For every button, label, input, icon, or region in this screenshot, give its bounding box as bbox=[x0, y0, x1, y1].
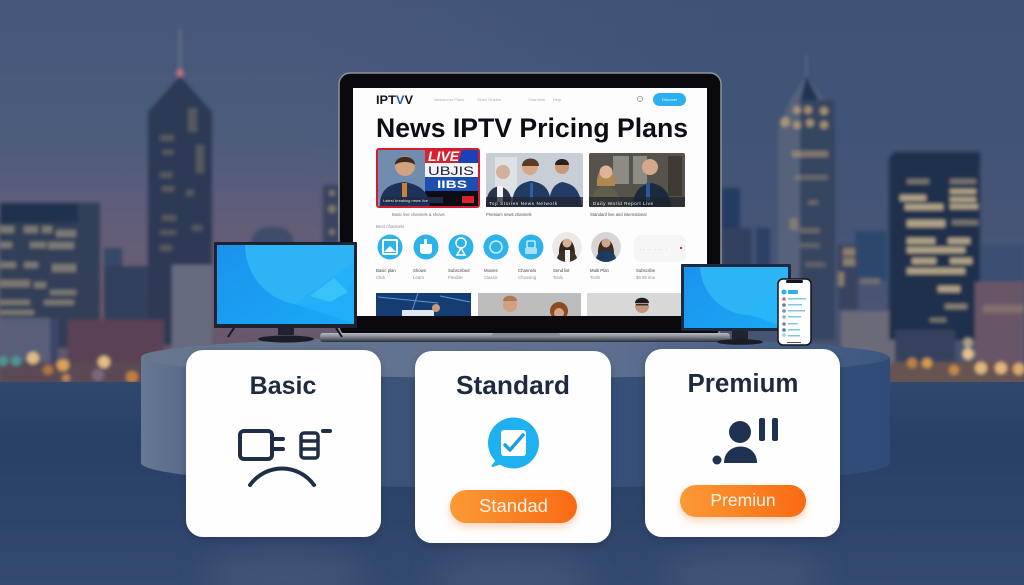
tv screen bbox=[217, 245, 354, 324]
thumbnail captions: Standard live and international bbox=[590, 212, 647, 217]
channel icon: picture bbox=[378, 234, 402, 260]
thumbnail captions: Premium news channels bbox=[486, 212, 532, 217]
background: dusk sky bbox=[0, 0, 1024, 385]
studio team thumbnail: Top Stories News Network bbox=[489, 201, 558, 206]
nav bar: Video Guides bbox=[477, 97, 501, 102]
monitor frame bbox=[681, 264, 791, 331]
right monitor bbox=[681, 264, 791, 345]
nav bar: IPTVV bbox=[376, 93, 413, 107]
bottom thumbnails bbox=[376, 292, 681, 316]
pricing card: Premium bbox=[645, 349, 840, 537]
phone menu list bbox=[782, 290, 806, 343]
channel icon: chat bbox=[484, 234, 508, 260]
Basic heading: Basic bbox=[250, 372, 316, 400]
channel labels: Multi Plan bbox=[590, 268, 609, 273]
channel labels: Basic plan bbox=[376, 268, 396, 273]
channel icon: hand bbox=[414, 234, 438, 260]
Premium button bbox=[680, 485, 806, 517]
Premium button: Premiun bbox=[710, 490, 776, 510]
channel labels: Tools bbox=[590, 275, 600, 280]
pricing card: Basic bbox=[186, 350, 381, 537]
more pill bbox=[640, 246, 682, 250]
right skyline buildings bbox=[722, 55, 1024, 382]
live news thumbnail: UBJIS bbox=[428, 164, 474, 178]
monitor stand bbox=[732, 331, 748, 340]
nav bar: Channels bbox=[528, 97, 545, 102]
phone bbox=[778, 279, 811, 345]
tv frame bbox=[214, 242, 357, 328]
channel icons row bbox=[378, 232, 686, 263]
nav bar: Discover bbox=[662, 97, 678, 102]
more pill: .. . ... . bbox=[640, 246, 669, 252]
channel labels: Channels bbox=[518, 268, 536, 273]
laptop screen bbox=[353, 88, 707, 320]
podium bbox=[141, 336, 890, 488]
channel labels: Subscribe bbox=[636, 268, 656, 273]
anchors thumbnail bbox=[589, 153, 685, 207]
live news thumbnail bbox=[377, 148, 479, 207]
background: blurred city skyline bbox=[0, 30, 1024, 385]
live news thumbnail: LIVE bbox=[428, 148, 460, 164]
channel labels bbox=[376, 268, 656, 280]
channel labels: Flexible bbox=[448, 275, 463, 280]
live news thumbnail: IIBS bbox=[437, 179, 467, 191]
tv feet and stand bbox=[228, 328, 342, 337]
floor bbox=[0, 382, 1024, 585]
channel labels: Shows bbox=[413, 268, 426, 273]
laptop base bbox=[320, 333, 730, 342]
Standard button bbox=[450, 490, 577, 523]
left skyline buildings bbox=[0, 30, 339, 385]
Standard heading: Standard bbox=[456, 370, 570, 400]
monitor screen bbox=[684, 267, 788, 328]
nav bar bbox=[376, 93, 686, 107]
laptop bezel bbox=[339, 73, 721, 337]
thumbnail captions: Best channels bbox=[376, 224, 405, 229]
portrait: host two bbox=[591, 232, 621, 263]
channel labels: Subscribed bbox=[448, 268, 470, 273]
channel labels: Choosing bbox=[518, 275, 537, 280]
Premium heading: Premium bbox=[688, 370, 798, 398]
channel labels: Classic bbox=[484, 275, 499, 280]
channel labels: Tools bbox=[553, 275, 563, 280]
channel labels: Learn bbox=[413, 275, 425, 280]
studio team thumbnail bbox=[486, 153, 583, 207]
channel labels: Send list bbox=[553, 268, 570, 273]
thumbnail captions bbox=[376, 212, 647, 229]
live news thumbnail: Latest breaking news live bbox=[383, 198, 429, 203]
icon: check badge bbox=[488, 418, 539, 468]
Standard button: Standad bbox=[479, 495, 548, 516]
nav bar: Newsroom Plans bbox=[434, 97, 464, 102]
channel labels: Click bbox=[376, 275, 386, 280]
channel labels: Movies bbox=[484, 268, 498, 273]
anchors thumbnail: Daily World Report Live bbox=[593, 201, 653, 206]
channel labels: $9.95 /mo bbox=[636, 275, 656, 280]
laptop bbox=[320, 73, 730, 342]
icon: user with bars bbox=[712, 418, 778, 464]
portrait: host one bbox=[552, 232, 582, 263]
city bokeh lights bbox=[0, 338, 1024, 384]
nav bar: Help bbox=[553, 97, 562, 102]
thumbnail captions: Basic live channels & shows bbox=[392, 212, 445, 217]
pricing card: Standard bbox=[415, 351, 611, 543]
left TV bbox=[214, 242, 357, 342]
channel icon: device bbox=[518, 234, 544, 260]
channel icon: globe bbox=[448, 234, 474, 260]
screen title: News IPTV Pricing Plans bbox=[376, 113, 688, 143]
icon: basic devices bbox=[240, 431, 330, 485]
